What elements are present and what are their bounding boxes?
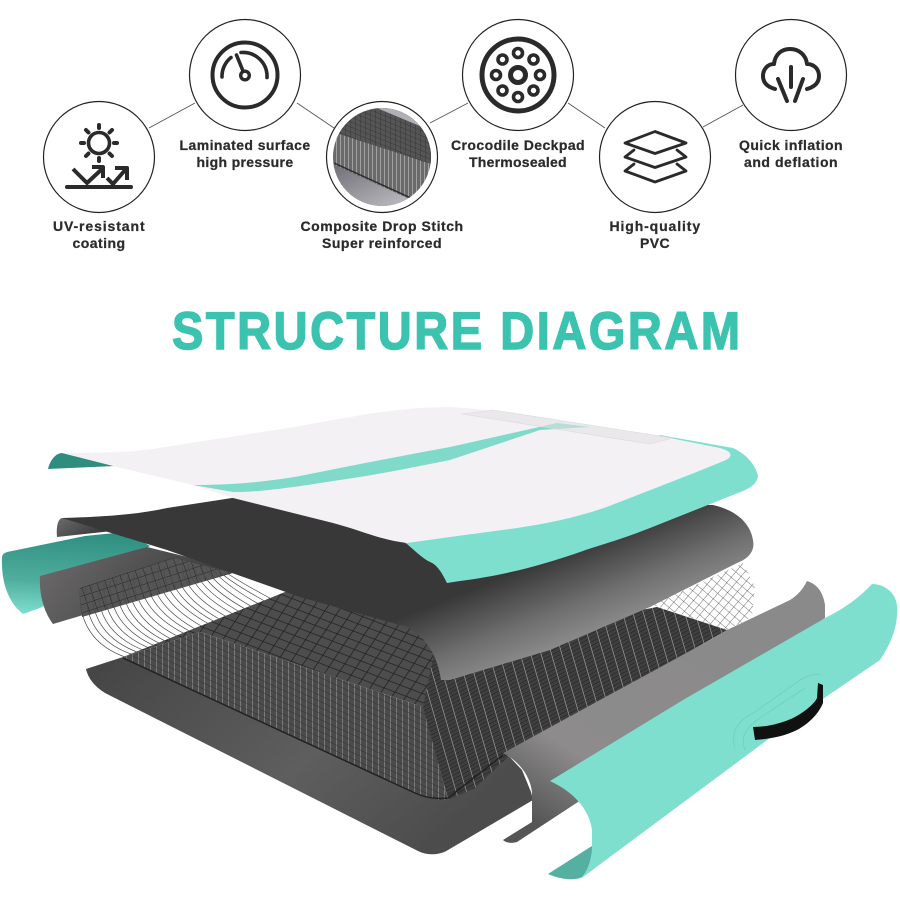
feature: crocodile deckpad [451,20,585,170]
detail: handle patch rings [734,674,820,750]
photo: drop stitch close-up [333,108,431,206]
label: UV-resistant coating: UV-resistant [53,218,145,234]
label: high-quality PVC: PVC [640,235,670,251]
feature: laminated surface [180,20,310,170]
icon: pressure gauge [212,42,278,108]
layer: bottom gray sheet [86,657,533,854]
mesh: stitched edge on bottom sheet [123,658,503,798]
mesh: curved rear stitches [80,563,277,657]
label: composite drop stitch super reinforced: Super reinforced [322,235,442,251]
label: crocodile deckpad thermosealed: Crocodile Deckpad [451,137,585,153]
connector lines between feature circles [149,103,743,128]
label: crocodile deckpad thermosealed: Thermosealed [469,154,567,170]
layer: right gray side strip [503,581,825,843]
mesh: dark rear section [80,558,233,617]
feature: composite drop stitch [300,102,464,251]
detail: top sheet stripe [193,423,590,492]
mesh: right rear section [653,563,755,630]
layer: middle gray sheet rear flap [57,518,130,537]
feature: quick inflation [736,20,846,170]
icon: stacked layers [625,132,686,182]
feature: UV-resistant coating [44,102,154,251]
layer: left dark side sheet [40,547,240,624]
diagram: exploded mat structure [2,407,897,879]
detail: faint label panel [462,410,673,444]
label: laminated surface high pressure: Laminated surface [180,137,310,153]
label: composite drop stitch super reinforced: Composite Drop Stitch [300,218,464,234]
label: quick inflation and deflation: Quick inflation [739,137,843,153]
feature: high-quality PVC [600,102,710,251]
layer: top teal back corner [48,453,115,469]
label: laminated surface high pressure: high pressure [196,154,294,170]
layer: top sheet teal border [400,435,758,583]
detail: inner flap shadow [548,846,592,879]
icon: black carry handle [753,683,823,740]
mesh: front face with vertical stitches [123,632,450,800]
heading: structure diagram: STRUCTURE DIAGRAM [172,301,740,361]
layer: middle gray sheet [62,498,753,680]
label: UV-resistant coating: coating [72,235,126,251]
icon: sun over reflected arrows [67,125,131,187]
mesh: top surface [123,590,470,707]
mesh: long side tube [423,607,727,800]
icon: deckpad valve [482,39,554,111]
layer: right teal side strip [548,584,897,879]
label: quick inflation and deflation: and deflation [744,154,838,170]
label: high-quality PVC: High-quality [610,218,700,234]
layer: left teal side strip [2,532,150,614]
layer: top sheet white deck [62,407,731,543]
mesh: white rear section [82,573,307,657]
icon: cloud with arrows [763,49,819,101]
